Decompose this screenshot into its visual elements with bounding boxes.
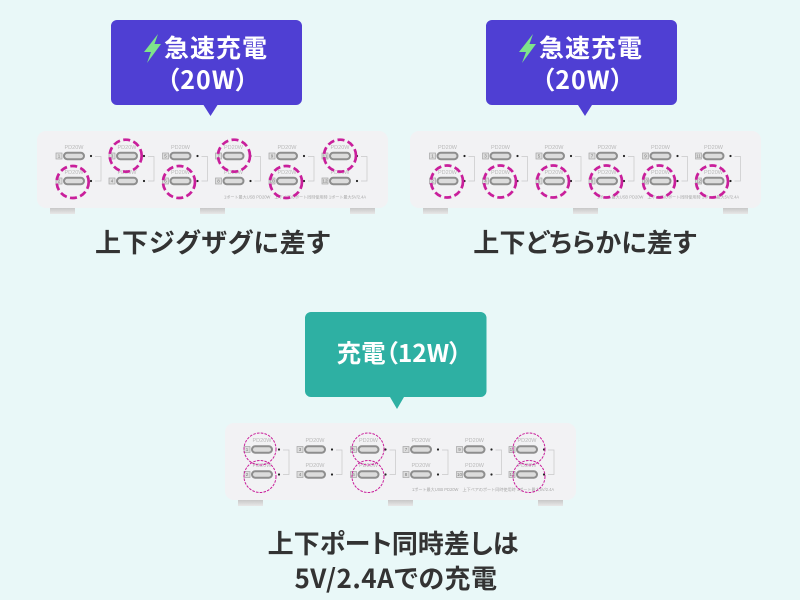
port labels: PD20W — [359, 438, 379, 444]
port numbers: 9 — [271, 154, 274, 159]
dashed highlight circles — [57, 140, 356, 198]
port numbers: 5 — [352, 447, 355, 452]
port labels: PD20W — [224, 145, 244, 151]
caption: simultaneous charging note — [268, 524, 519, 596]
port labels: PD20W — [704, 170, 724, 176]
port labels: PD20W — [65, 170, 84, 176]
port labels: PD20W — [171, 170, 191, 176]
port labels: PD20W — [545, 145, 564, 151]
port numbers: 12 — [696, 179, 701, 184]
port numbers: 10 — [269, 179, 275, 184]
caption: one side: 上下どちらかに差す — [473, 223, 697, 260]
port numbers: 4 — [111, 179, 114, 184]
port numbers: 8 — [217, 179, 220, 184]
port numbers: 2 — [58, 179, 61, 184]
port numbers: 8 — [405, 472, 408, 477]
port numbers: 11 — [696, 154, 701, 159]
spec caption: 1ポート最大USB PD20W 上下ペアのポート同時使用時 1ポート最大5V/2.4A — [597, 194, 739, 200]
port labels: PD20W — [412, 463, 431, 469]
port numbers: 1 — [58, 154, 61, 159]
port labels: PD20W — [518, 463, 537, 469]
port labels: PD20W — [118, 170, 137, 176]
port labels: PD20W — [598, 170, 617, 176]
port numbers — [246, 447, 515, 477]
thin dashed highlight circles — [244, 433, 545, 492]
port labels: PD20W — [438, 145, 458, 151]
port labels: PD20W — [253, 463, 272, 469]
port numbers: 6 — [538, 179, 541, 184]
port numbers: 7 — [217, 154, 220, 159]
port labels: PD20W — [518, 438, 537, 444]
port labels — [65, 145, 350, 176]
callout text left: 急速充電 — [164, 29, 268, 65]
port labels: PD20W — [306, 438, 325, 444]
port labels — [438, 145, 724, 176]
port labels: PD20W — [306, 463, 325, 469]
port labels: PD20W — [704, 145, 724, 151]
port numbers: 4 — [484, 179, 487, 184]
charger panel: simultaneous — [225, 423, 576, 506]
callout text left: （20W） — [167, 61, 249, 97]
port numbers: 3 — [299, 447, 302, 452]
callout text right: 急速充電 — [539, 29, 643, 65]
port numbers: 12 — [322, 179, 328, 184]
port labels: PD20W — [465, 438, 485, 444]
port labels: PD20W — [278, 145, 297, 151]
port labels: PD20W — [331, 145, 350, 151]
callout: charge 12W — [305, 312, 486, 409]
callout: fast charge 20W right — [486, 20, 677, 116]
caption: simultaneous charging note: 5V/2.4Aでの充電 — [294, 559, 498, 596]
port numbers: 1 — [246, 447, 249, 452]
icon: lightning bolt left — [144, 34, 161, 63]
port labels: PD20W — [491, 145, 511, 151]
spec caption: 1ポート最大USB PD20W 上下ペアのポート同時使用時 1ポート最大5V/2.4A — [412, 486, 554, 492]
port labels: PD20W — [171, 145, 191, 151]
port numbers: 11 — [510, 447, 515, 452]
callout text right — [539, 29, 643, 97]
port labels: PD20W — [412, 438, 431, 444]
port numbers: 12 — [509, 472, 515, 477]
port labels: PD20W — [598, 145, 617, 151]
port labels: PD20W — [545, 170, 564, 176]
port labels: PD20W — [253, 438, 272, 444]
port labels: PD20W — [278, 170, 297, 176]
port numbers: 10 — [457, 472, 462, 477]
port numbers — [58, 154, 328, 184]
port numbers: 2 — [246, 472, 249, 477]
caption: simultaneous charging note: 上下ポート同時差しは — [268, 524, 519, 561]
port numbers: 11 — [323, 154, 328, 159]
callout text right: （20W） — [542, 61, 624, 97]
port numbers: 6 — [352, 472, 355, 477]
port labels: PD20W — [359, 463, 379, 469]
charger panel: one side — [410, 131, 761, 214]
port numbers: 1 — [431, 154, 434, 159]
port numbers: 9 — [644, 154, 647, 159]
caption: zigzag: 上下ジグザグに差す — [95, 223, 331, 260]
port labels: PD20W — [465, 463, 485, 469]
port labels: PD20W — [438, 170, 458, 176]
port labels — [253, 438, 537, 469]
dashed highlight circles — [431, 166, 728, 198]
port labels: PD20W — [224, 170, 244, 176]
port numbers: 3 — [484, 154, 487, 159]
port labels: PD20W — [331, 170, 350, 176]
port numbers: 7 — [405, 447, 408, 452]
port numbers: 8 — [591, 179, 594, 184]
callout text left — [164, 29, 268, 97]
charger panel: zigzag — [37, 131, 388, 214]
port numbers: 6 — [164, 179, 167, 184]
port labels: PD20W — [118, 145, 137, 151]
port numbers: 4 — [299, 472, 302, 477]
callout: fast charge 20W left — [111, 20, 302, 116]
port labels: PD20W — [491, 170, 511, 176]
port numbers: 7 — [591, 154, 594, 159]
icon: lightning bolt right — [519, 34, 536, 63]
spec caption: 1ポート最大USB PD20W 上下ペアのポート同時使用時 1ポート最大5V/2.4A — [224, 194, 366, 200]
port numbers: 3 — [111, 154, 114, 159]
port numbers: 9 — [458, 447, 461, 452]
port labels: PD20W — [651, 170, 671, 176]
port numbers: 10 — [643, 179, 648, 184]
port numbers — [431, 154, 701, 184]
port numbers: 5 — [164, 154, 167, 159]
port numbers: 5 — [538, 154, 541, 159]
callout text: 充電（12W） — [337, 335, 461, 370]
port numbers: 2 — [431, 179, 434, 184]
port labels: PD20W — [65, 145, 84, 151]
port labels: PD20W — [651, 145, 671, 151]
